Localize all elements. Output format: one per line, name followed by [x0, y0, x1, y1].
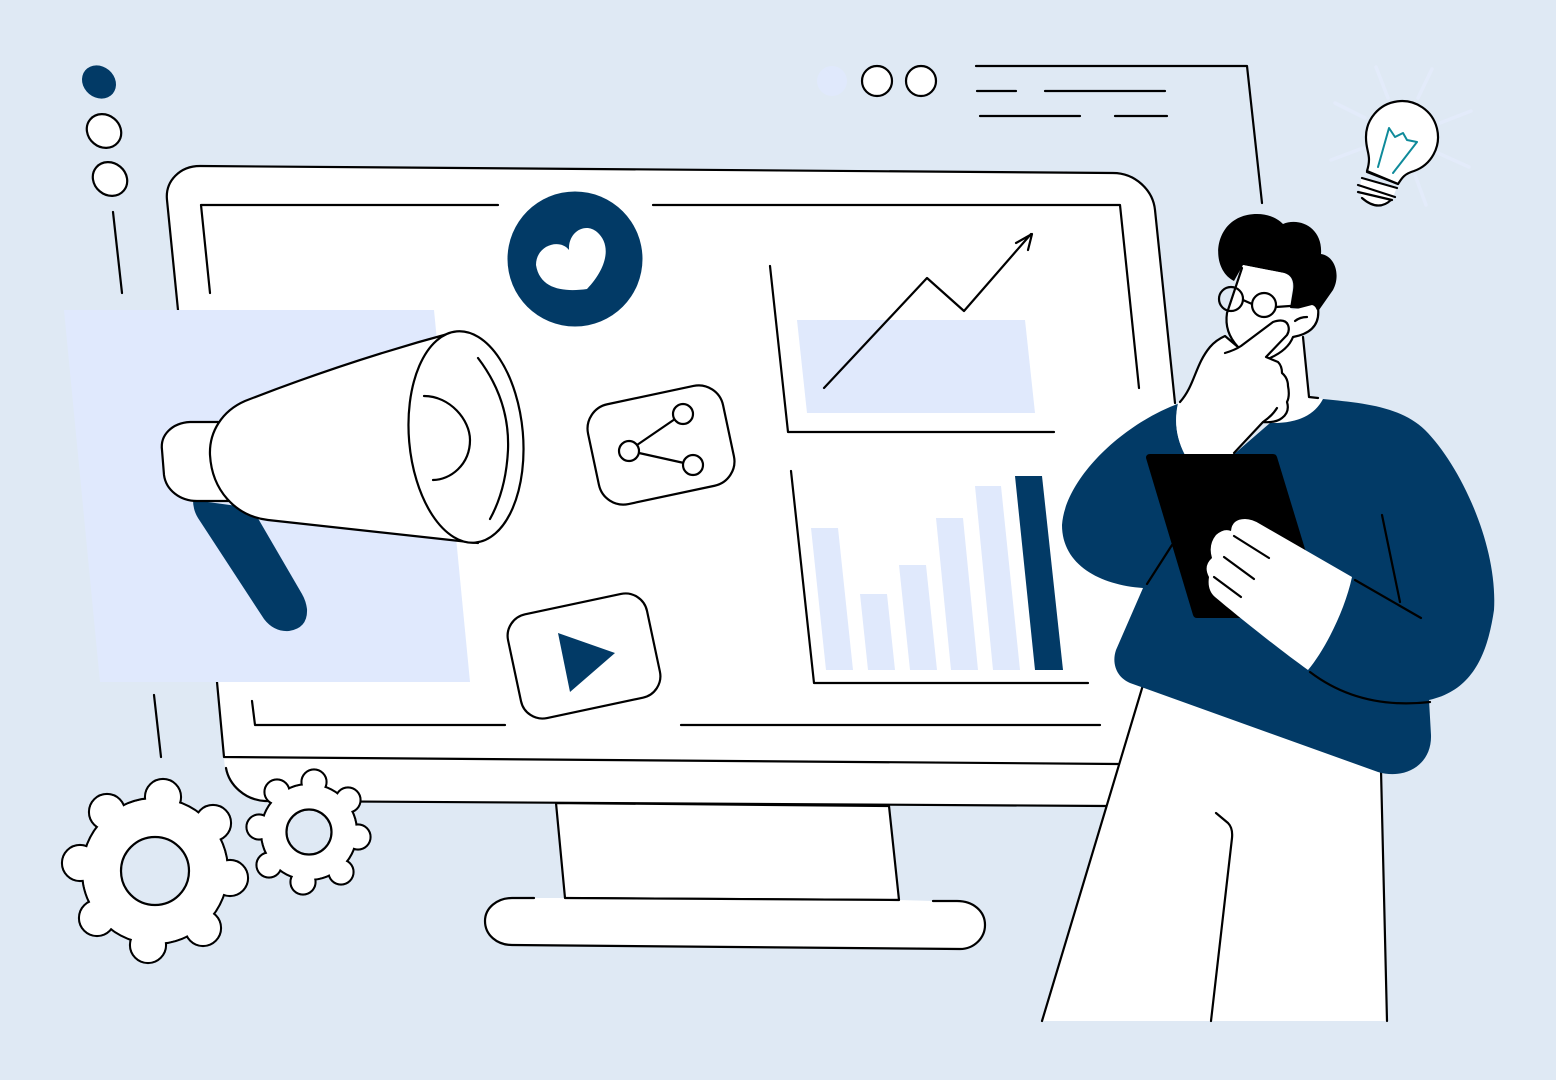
- megaphone handle: [193, 500, 307, 631]
- face: [1226, 265, 1318, 358]
- megaphone panel: [64, 310, 470, 682]
- sweater: [1062, 399, 1494, 774]
- text placeholder lines and connector: [976, 66, 1262, 203]
- icon: video play card: [504, 589, 664, 723]
- glasses: [1219, 287, 1290, 317]
- icon: share card: [583, 381, 739, 509]
- hair: [1218, 214, 1337, 310]
- trousers: [1042, 685, 1387, 1021]
- sweater fold lines: [1147, 515, 1430, 703]
- connector lines at left: [113, 212, 161, 757]
- hand on chin: [1176, 321, 1289, 455]
- gear: small: [246, 770, 370, 894]
- monitor stand: [556, 803, 899, 900]
- horizontal dots: top centre: [817, 66, 936, 96]
- hand on tablet: [1207, 519, 1352, 670]
- icon: light bulb: [1331, 67, 1471, 206]
- icon: heart badge: [508, 192, 642, 326]
- monitor screen body: [167, 166, 1185, 806]
- neck: [1250, 330, 1323, 423]
- monitor base: [485, 898, 985, 949]
- vertical dots: top left: [75, 59, 134, 203]
- person: [1042, 214, 1494, 1021]
- icon: megaphone: [162, 326, 532, 631]
- gear: large: [62, 779, 248, 963]
- monitor: [167, 166, 1185, 949]
- tablet: [1146, 454, 1326, 618]
- bar chart: [791, 471, 1088, 683]
- line chart: [770, 234, 1054, 432]
